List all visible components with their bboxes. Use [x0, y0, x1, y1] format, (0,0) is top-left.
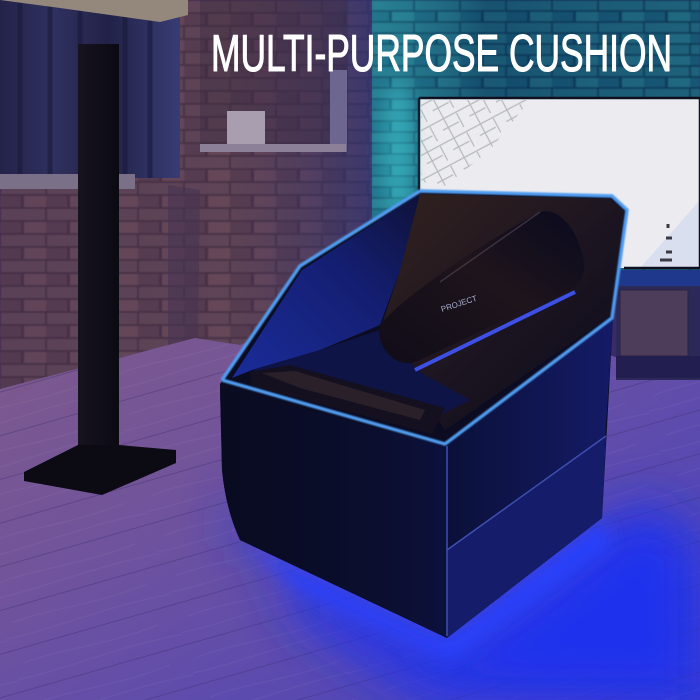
cushion logo: PROJECT: [440, 294, 478, 314]
blue floor glow: [225, 480, 700, 700]
wall shelf with calendar: [200, 0, 348, 152]
chair back interior: [380, 194, 624, 430]
pocket panel: [447, 436, 606, 638]
window and curtain: [0, 0, 180, 189]
seat back shadow: [252, 330, 470, 415]
teal lit wall: [372, 0, 700, 280]
left arm: [232, 194, 420, 378]
body seams: [447, 436, 606, 636]
seat: [250, 365, 445, 434]
seat highlight: [262, 371, 425, 420]
floor: [0, 290, 700, 700]
tv screen marks: [660, 224, 672, 260]
armchair: [220, 191, 627, 638]
chair full silhouette: [220, 191, 627, 638]
chair piping: [222, 191, 627, 444]
floor lamp: [0, 0, 188, 495]
chair front body: [220, 388, 447, 638]
right side panel: [445, 318, 613, 550]
tv cabinet: [616, 270, 700, 380]
lumbar cushion: [379, 211, 584, 370]
television: [419, 98, 700, 268]
brick wall: [0, 0, 420, 400]
cyan wall glow: [382, 80, 414, 220]
